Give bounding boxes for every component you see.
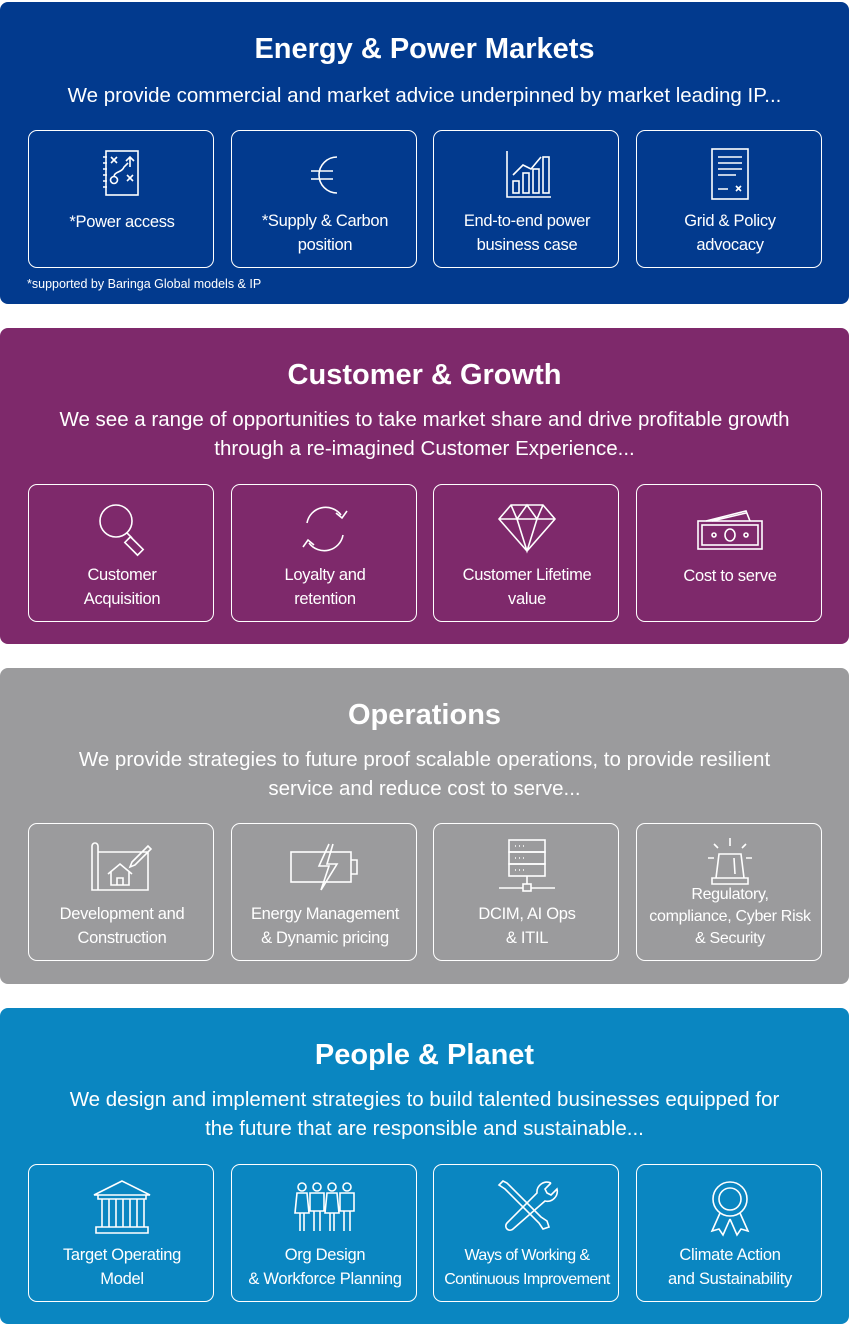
card: DCIM [433,823,619,961]
subtitle [70,1088,779,1140]
card: ways of working: Continuous Improvement [444,1270,610,1288]
card: regulatory: Regulatory, [691,886,769,903]
card: energy management [231,823,417,961]
subtitle: We provide commercial and market advice underpinned by market leading IP... [68,84,781,107]
card: climate action: and Sustainability [668,1270,792,1288]
card: development: Construction [77,928,167,946]
card: target operating model: Model [100,1270,144,1288]
card: DCIM: DCIM, AI Ops [478,905,576,923]
card: loyalty: Loyalty and [284,566,366,584]
subtitle: We see a range of opportunities to take market share and drive profitable growth [59,408,790,431]
card: regulatory: compliance, Cyber Risk [649,908,811,925]
card: grid & policy [636,130,822,268]
card: DCIM: & ITIL [506,928,548,946]
subtitle [79,748,770,800]
heading: Energy & Power Markets [254,33,595,65]
card: org design [231,1164,417,1302]
card: climate action: Climate Action [679,1246,781,1264]
heading: Operations [348,699,501,731]
card: loyalty: retention [294,590,356,608]
panel: customer & growth [0,328,849,644]
card: climate action [636,1164,822,1302]
panel: energy & power markets [0,2,849,304]
card: loyalty [231,484,417,622]
heading: People & Planet [315,1039,534,1071]
card: lifetime value [433,484,619,622]
card: supply & carbon [231,130,417,268]
card: regulatory [636,823,822,961]
subtitle: through a re-imagined Customer Experience... [214,437,635,460]
subtitle: service and reduce cost to serve... [268,777,581,800]
card: customer acquisition: Acquisition [84,590,160,608]
card: target operating model [28,1164,214,1302]
card: customer acquisition: Customer [87,566,157,584]
subtitle: We provide strategies to future proof scalable operations, to provide resilient [79,748,770,771]
card: supply & carbon: *Supply & Carbon [262,212,388,230]
heading: Customer & Growth [288,359,561,391]
card: grid & policy: advocacy [696,236,764,254]
card: regulatory: & Security [695,930,765,947]
card: grid & policy: Grid & Policy [684,212,776,230]
card: cost to serve: Cost to serve [683,567,777,585]
card: power access [28,130,214,268]
card: target operating model: Target Operating [63,1246,181,1264]
card: power business case [433,130,619,268]
card: ways of working [433,1164,619,1302]
card: energy management: & Dynamic pricing [261,928,389,946]
card: supply & carbon: position [298,236,352,254]
footnote: *supported by Baringa Global models & IP [27,277,261,291]
subtitle [59,408,790,460]
panel: people & planet [0,1008,849,1324]
card: org design: & Workforce Planning [248,1270,402,1288]
card: power business case: business case [477,236,577,254]
card: lifetime value: value [508,590,546,608]
card: development [28,823,214,961]
card: cost to serve [636,484,822,622]
card: ways of working: Ways of Working & [465,1247,589,1264]
card: org design: Org Design [285,1246,365,1264]
card: power access: *Power access [69,213,175,231]
subtitle: We design and implement strategies to build talented businesses equipped for [70,1088,779,1111]
card: energy management: Energy Management [251,905,399,923]
card: customer acquisition [28,484,214,622]
panel: operations [0,668,849,984]
card: power business case: End-to-end power [464,212,590,230]
card: development: Development and [60,905,184,923]
card: lifetime value: Customer Lifetime [463,566,591,584]
subtitle: the future that are responsible and sustainable... [205,1117,644,1140]
